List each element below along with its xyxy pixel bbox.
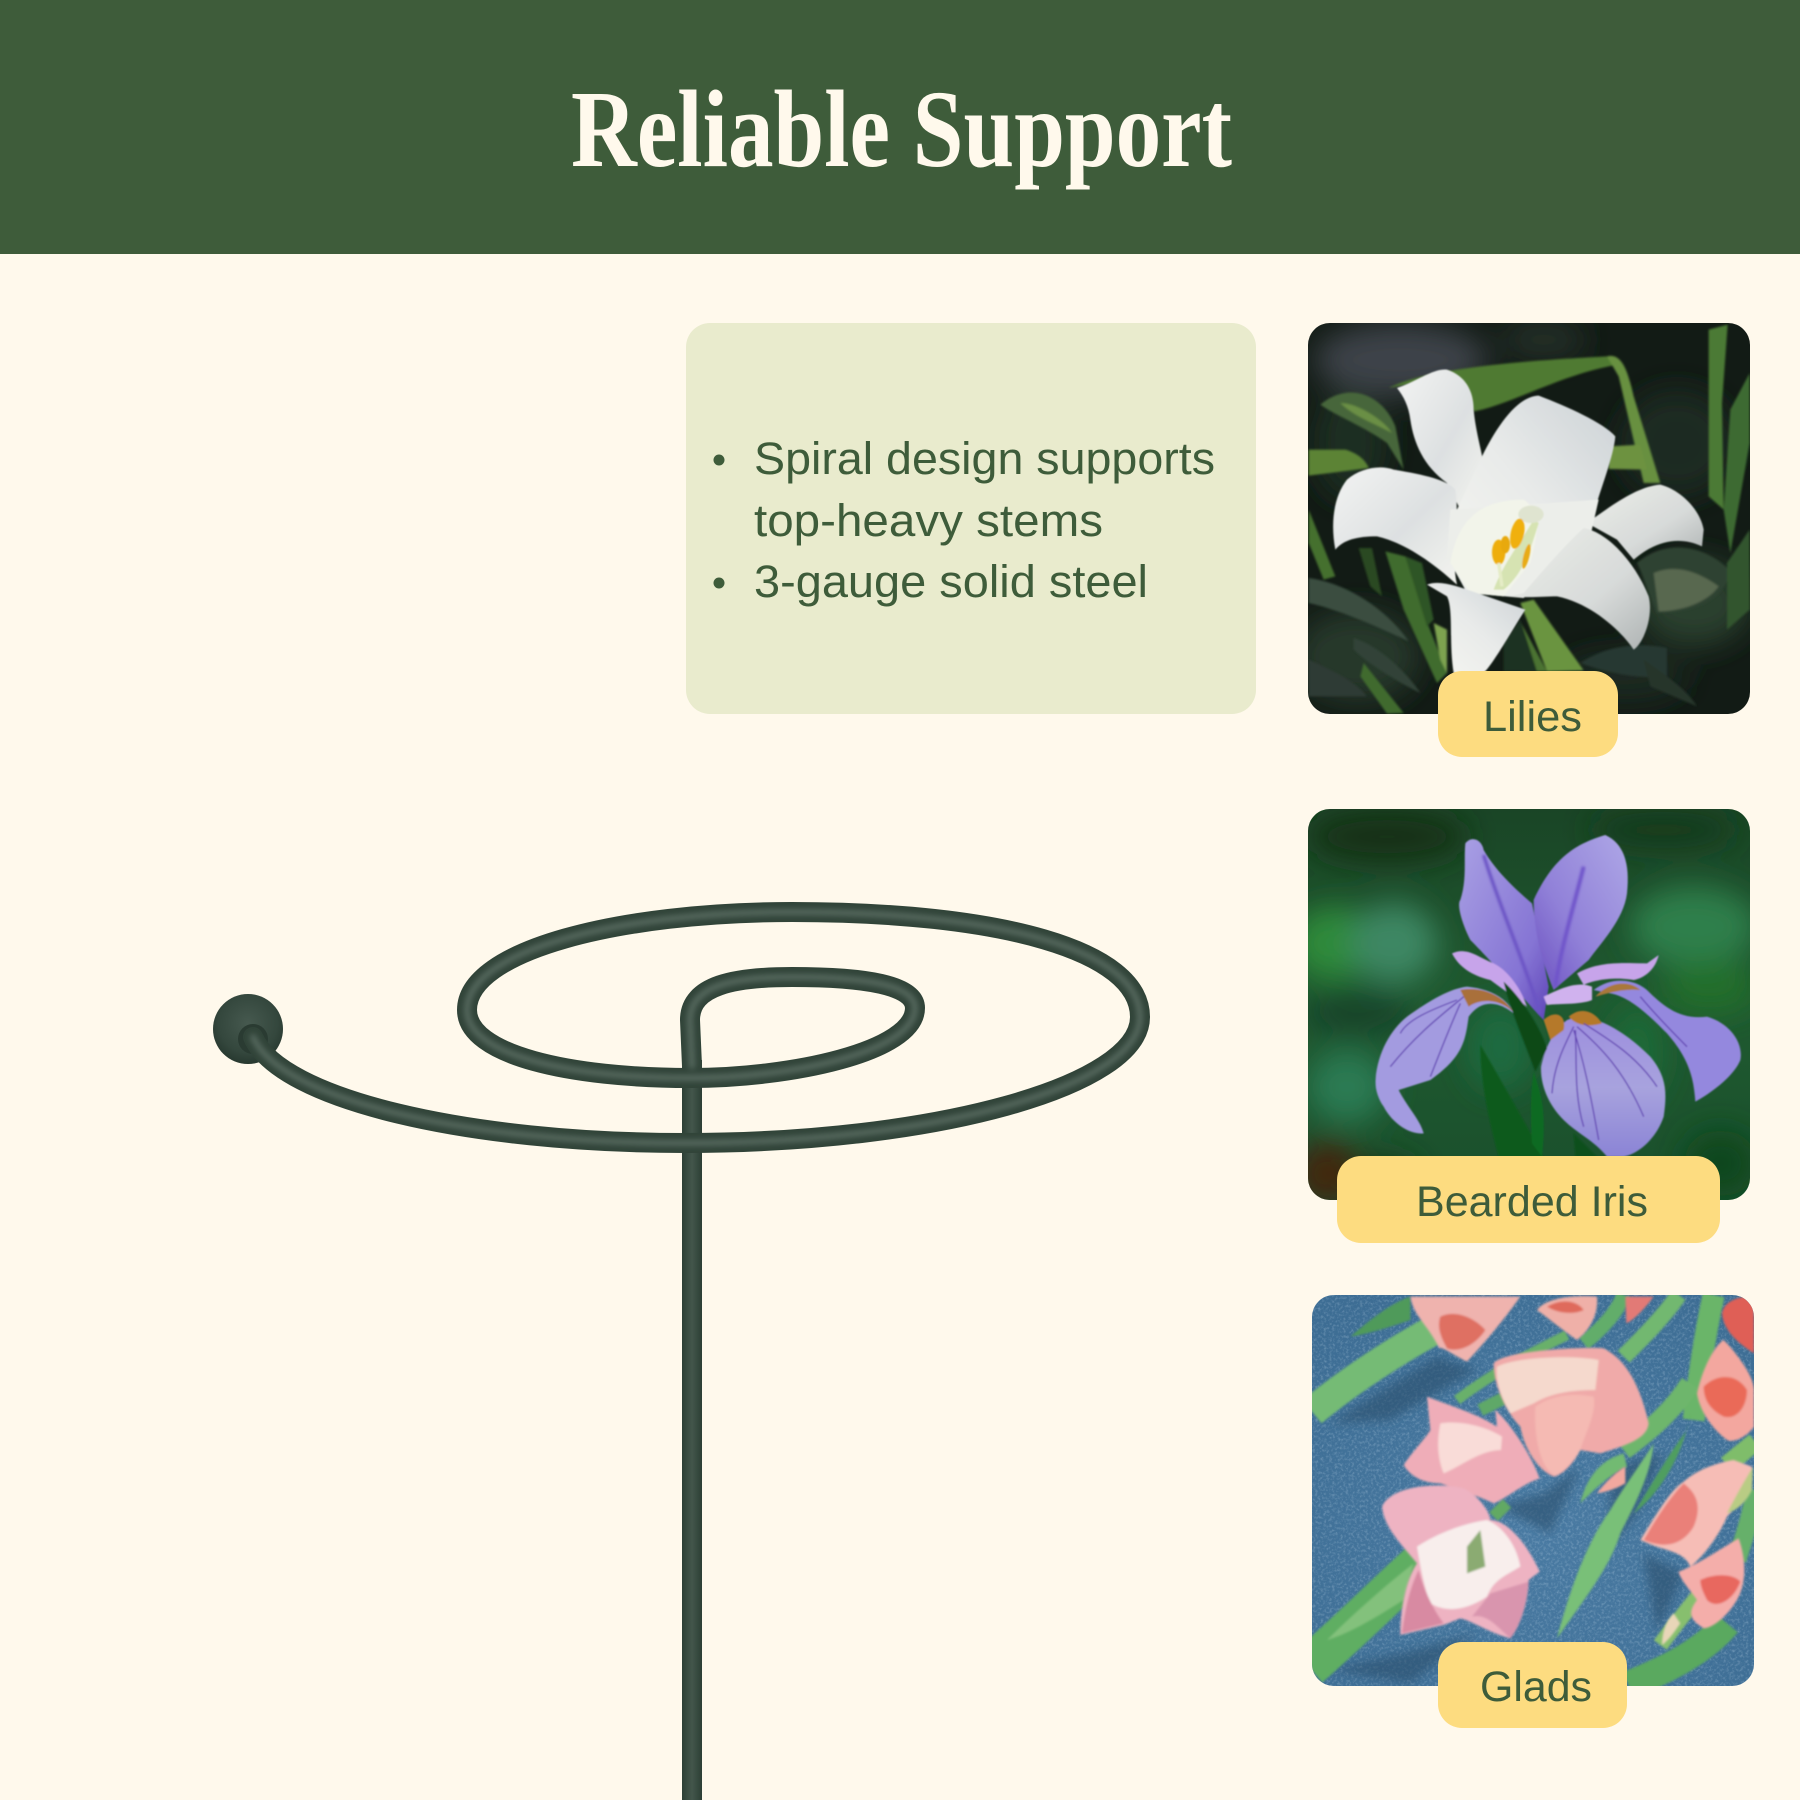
bullet list: Spiral design supports — [754, 433, 1215, 484]
spiral plant support stake — [213, 902, 1150, 1800]
background blur — [1294, 323, 1750, 703]
flowers — [1382, 1296, 1754, 1645]
header banner — [0, 0, 1800, 254]
bullet list — [714, 433, 1215, 607]
background blur — [1290, 810, 1757, 1207]
bullet list: top-heavy stems — [754, 495, 1103, 546]
spiral wire — [253, 912, 1140, 1143]
stamens — [1492, 506, 1544, 590]
label: Lilies: Lilies — [1483, 693, 1582, 741]
leaves — [1480, 1045, 1597, 1157]
bullet list: 3-gauge solid steel — [754, 556, 1148, 607]
petals — [1333, 370, 1704, 673]
label: Lilies — [1438, 671, 1618, 757]
foliage — [1309, 325, 1750, 714]
shadows — [1330, 1357, 1684, 1683]
stem — [682, 1060, 702, 1800]
photo: gladiolus — [1312, 1295, 1754, 1686]
petals — [1375, 835, 1741, 1157]
panel: key features — [686, 323, 1256, 714]
photo: bearded iris — [1308, 809, 1750, 1200]
stems and leaves — [1309, 1295, 1755, 1685]
label: Bearded Iris: Bearded Iris — [1416, 1178, 1648, 1226]
end ball — [213, 994, 283, 1064]
title: Reliable Support — [571, 68, 1232, 190]
label: Bearded Iris — [1337, 1156, 1720, 1243]
label: Glads — [1438, 1642, 1627, 1728]
photo: white lily — [1308, 323, 1750, 714]
label: Glads: Glads — [1480, 1663, 1592, 1711]
